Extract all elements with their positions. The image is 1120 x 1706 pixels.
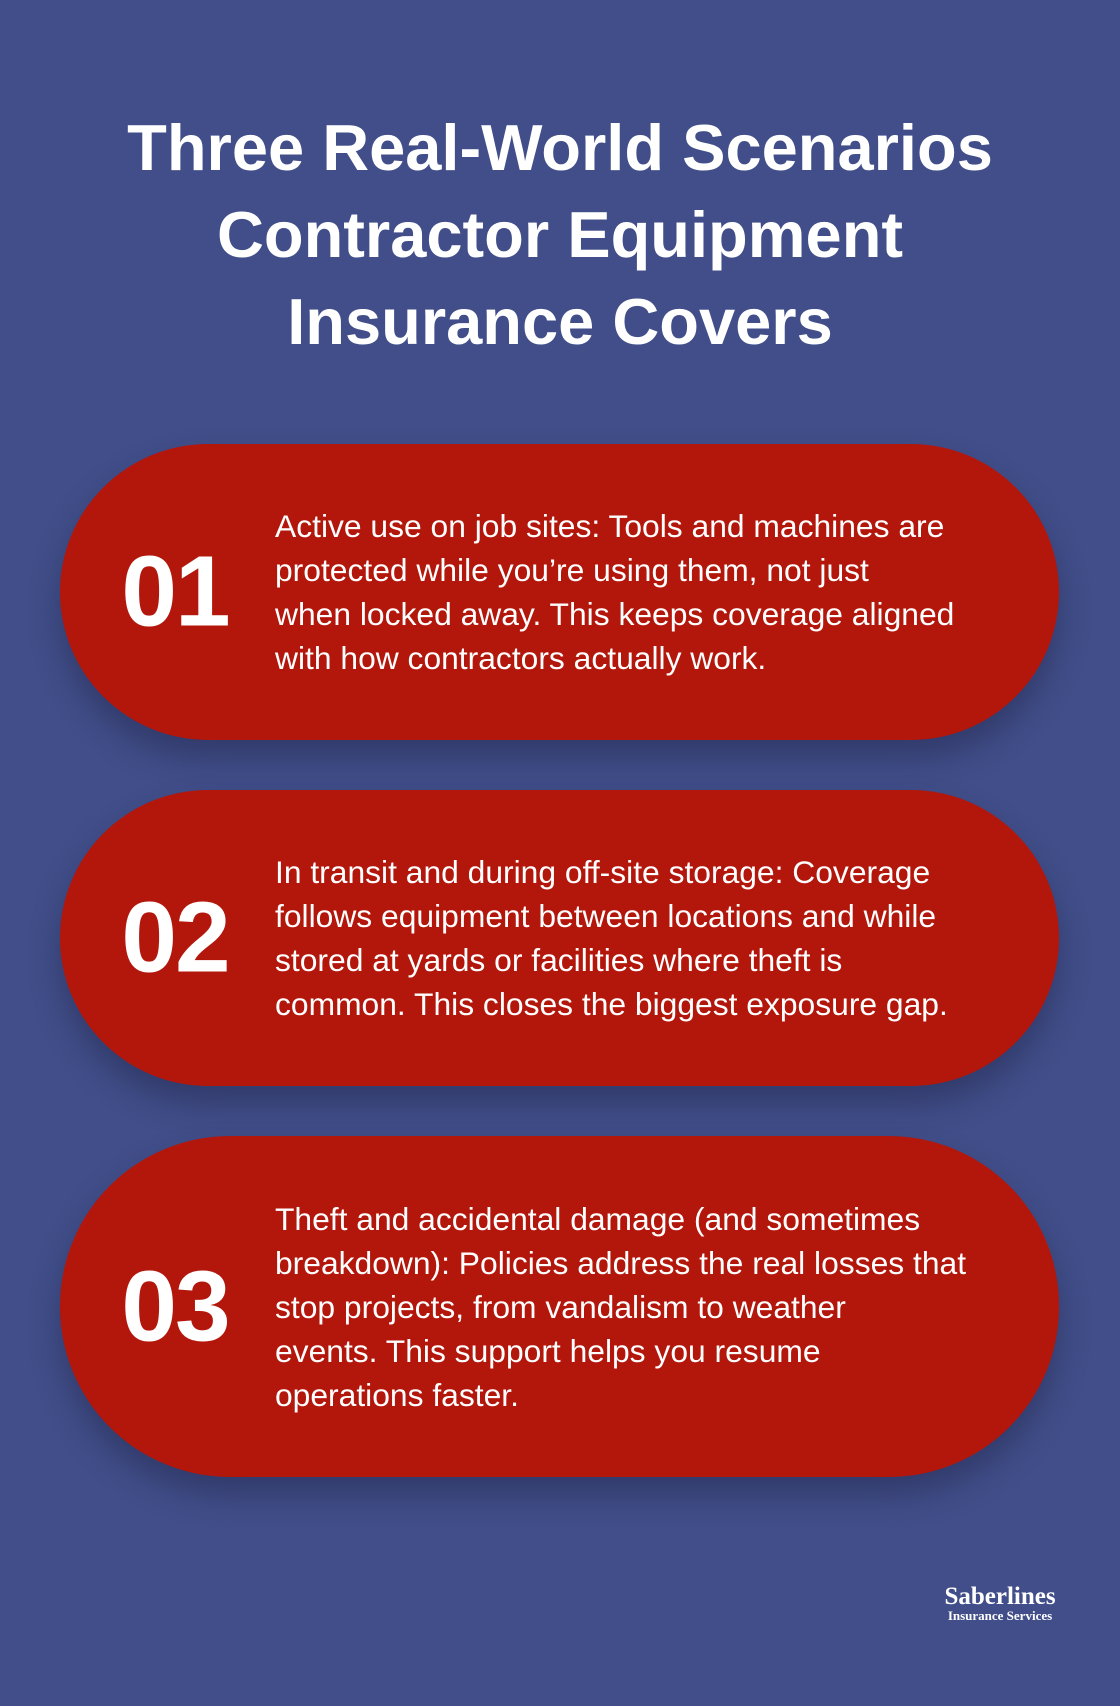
text 01: when locked away. This keeps coverage aligned <box>275 596 954 632</box>
title <box>127 111 993 358</box>
logo: Insurance Services <box>948 1608 1052 1623</box>
text 03: breakdown): Policies address the real losses that <box>275 1244 966 1280</box>
text 02: stored at yards or facilities where theft is <box>275 942 842 978</box>
text 01: protected while you’re using them, not just <box>275 552 869 588</box>
text 02: follows equipment between locations and while <box>275 898 936 934</box>
title: Three Real-World Scenarios <box>127 111 993 184</box>
text 02: In transit and during off-site storage: Coverage <box>275 854 930 890</box>
text 02 <box>275 854 948 1022</box>
title: Insurance Covers <box>287 285 833 358</box>
text 03 <box>275 1200 966 1412</box>
panel: card 02 <box>60 790 1059 1086</box>
text 03: events. This support helps you resume <box>275 1332 821 1368</box>
text 01: with how contractors actually work. <box>275 640 766 676</box>
number 03: 03 <box>121 1250 229 1362</box>
text 01 <box>275 508 954 676</box>
text 03: Theft and accidental damage (and sometimes <box>275 1200 920 1236</box>
number 02: 02 <box>121 882 229 994</box>
panel: card 03 <box>60 1136 1059 1477</box>
title: Contractor Equipment <box>217 198 903 271</box>
text 03: operations faster. <box>275 1376 519 1412</box>
text 01: Active use on job sites: Tools and machines are <box>275 508 944 544</box>
logo <box>944 1583 1056 1623</box>
panel: card 01 <box>60 444 1059 740</box>
text 03: stop projects, from vandalism to weather <box>275 1288 846 1324</box>
text 02: common. This closes the biggest exposure gap. <box>275 986 948 1022</box>
number 01: 01 <box>121 536 229 648</box>
logo: Saberlines <box>944 1583 1056 1610</box>
